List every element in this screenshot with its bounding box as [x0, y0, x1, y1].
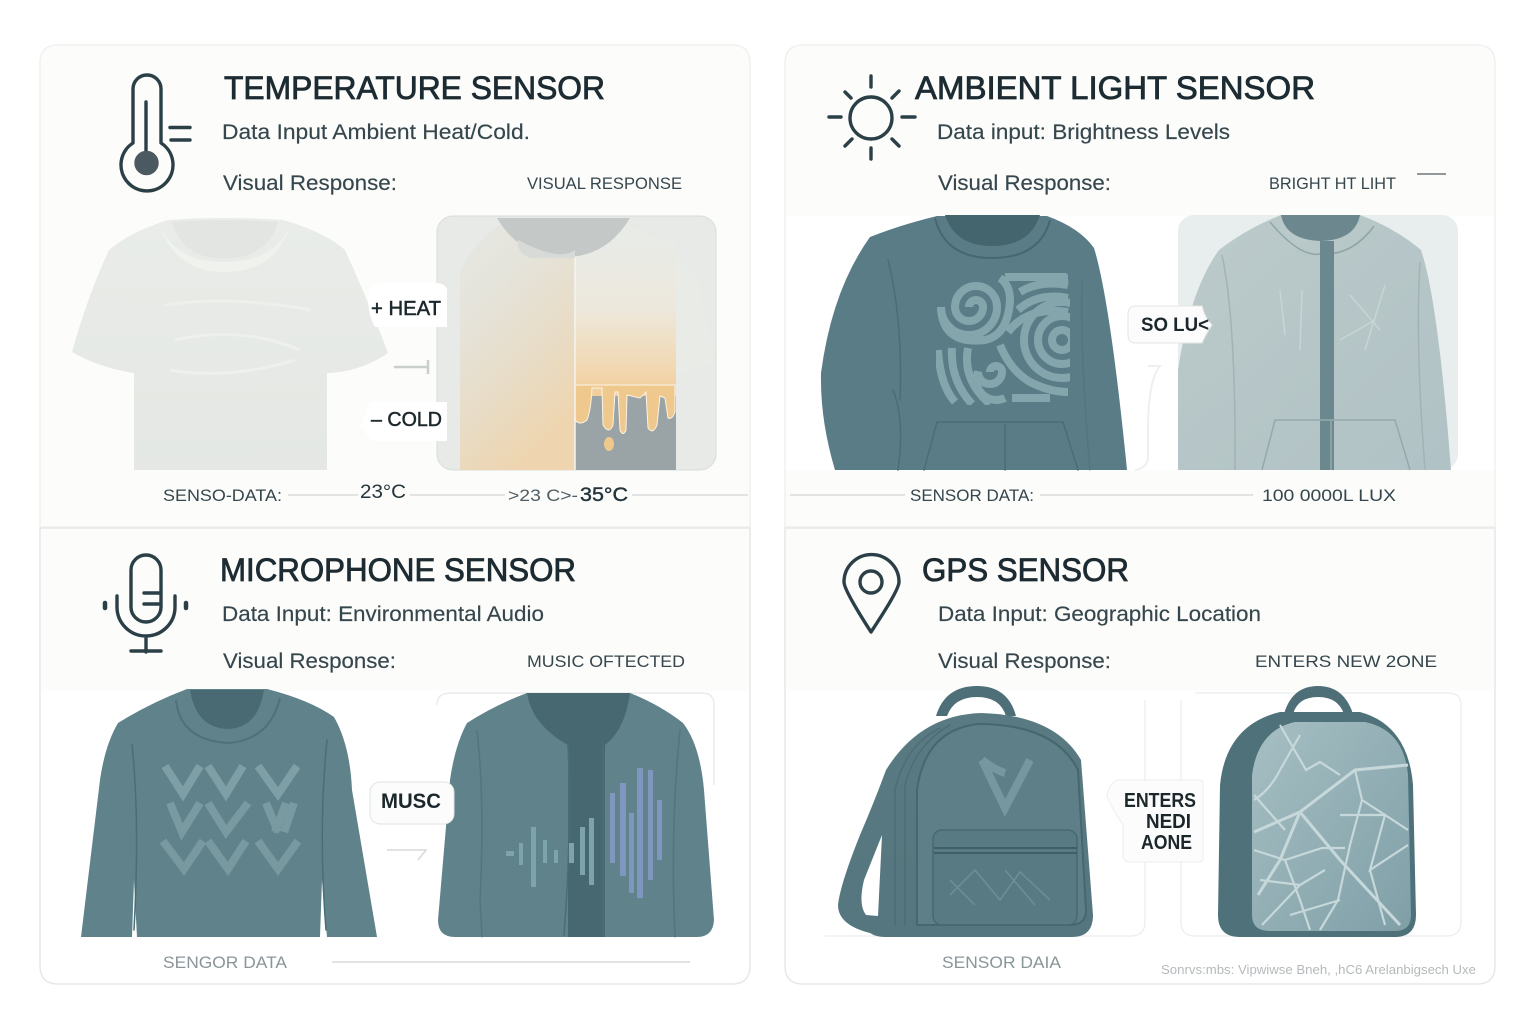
sweatshirt with chevron pattern — [81, 689, 377, 937]
sensor data row: 35°C — [580, 485, 628, 506]
chevron logo — [982, 760, 1030, 808]
bubble: lux — [1128, 306, 1212, 343]
sensor data row: 23°C — [360, 482, 406, 503]
right column label: MUSIC OFTECTED — [527, 652, 685, 671]
panel background — [785, 45, 1495, 527]
sensor data label: SENGOR DATA — [163, 953, 288, 972]
icon: sun — [829, 76, 915, 159]
heading: TEMPERATURE SENSOR — [224, 70, 605, 106]
icon: location pin — [844, 555, 899, 632]
header band — [41, 529, 749, 691]
bubble: lux: SO LU< — [1141, 315, 1209, 336]
dark patterned sweatshirt — [821, 215, 1127, 470]
map lines — [1254, 725, 1408, 930]
bubble: cold: – COLD — [371, 409, 442, 431]
arrow — [387, 850, 426, 860]
visual response label: Visual Response: — [938, 650, 1111, 673]
data input text: Data Input Ambient Heat/Cold. — [222, 121, 530, 144]
panel background — [40, 528, 750, 984]
swirl pattern — [936, 273, 1070, 405]
sensor data row: SENSO-DATA: — [163, 486, 282, 505]
chevrons — [163, 766, 298, 869]
right column label: BRIGHT HT LIHT — [1269, 174, 1396, 193]
panel: temperature sensor — [40, 45, 750, 527]
sensor data row: >23 C>- — [508, 486, 578, 505]
bubble: enters new zone: NEDI — [1146, 811, 1191, 833]
sound wave bars — [506, 818, 594, 887]
header band — [786, 529, 1494, 691]
sensor data row — [790, 486, 1396, 505]
heading: AMBIENT LIGHT SENSOR — [915, 70, 1315, 106]
panel: gps sensor — [785, 528, 1495, 984]
visual response label: Visual Response: — [223, 650, 396, 673]
backpack: neutral — [838, 686, 1093, 937]
front pocket — [933, 830, 1077, 925]
data input text: Data Input: Geographic Location — [938, 603, 1261, 626]
icon: microphone — [105, 555, 186, 652]
panel background — [40, 45, 750, 527]
right column label: ENTERS NEW 2ONE — [1255, 652, 1437, 671]
bubble: cold — [360, 402, 447, 441]
cardigan with sound wave — [438, 693, 714, 937]
bubble: enters new zone: ENTERS — [1124, 790, 1196, 812]
bubble: heat — [368, 283, 447, 327]
source note: Sonrvs:mbs: Vipwiwse Bneh, ,hC6 Arelanbigsech Uxe — [1161, 962, 1476, 977]
backpack: map display — [1218, 686, 1416, 937]
panel background — [785, 528, 1495, 984]
bubble: heat: + HEAT — [371, 298, 441, 320]
connector bracket — [1135, 366, 1160, 470]
icon: thermometer — [121, 75, 190, 191]
pocket — [924, 422, 1078, 470]
strap gap — [861, 835, 882, 916]
bubble: enters new zone: AONE — [1141, 832, 1192, 854]
sensor data row: SENSOR DATA: — [910, 486, 1034, 505]
heading: MICROPHONE SENSOR — [220, 552, 576, 588]
right column label: VISUAL RESPONSE — [527, 174, 682, 193]
neutral t-shirt — [72, 218, 388, 470]
sensor data row — [163, 482, 748, 506]
light hoodie panel — [1178, 215, 1458, 470]
heading: GPS SENSOR — [922, 552, 1129, 588]
garment area — [786, 216, 1494, 470]
bubble: enters new zone — [1107, 780, 1203, 862]
data input text: Data input: Brightness Levels — [937, 121, 1230, 144]
bubble: music — [370, 782, 454, 824]
response panel outline — [437, 693, 714, 785]
panel: ambient light sensor — [785, 45, 1495, 527]
panel: microphone sensor — [40, 528, 750, 984]
visual response label: Visual Response: — [223, 172, 397, 195]
color-changed t-shirt panel — [437, 216, 716, 470]
arrow — [394, 360, 428, 374]
image frames — [825, 693, 1461, 936]
heat drips — [575, 385, 675, 434]
sensor data row: 100 0000L LUX — [1262, 486, 1396, 505]
visual response label: Visual Response: — [938, 172, 1111, 195]
data input text: Data Input: Environmental Audio — [222, 603, 544, 626]
bubble: music: MUSC — [381, 790, 441, 813]
sensor data label: SENSOR DAIA — [942, 953, 1062, 972]
